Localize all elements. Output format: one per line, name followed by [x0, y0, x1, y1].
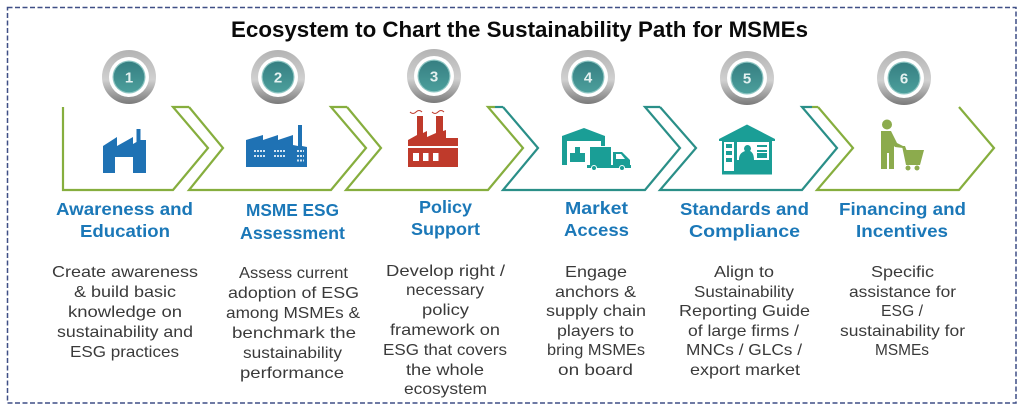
description 6: MSMEs [875, 342, 929, 359]
chevron 5 [660, 107, 837, 190]
description 3: policy [422, 302, 469, 319]
description 5: MNCs / GLCs / [686, 342, 803, 359]
heading 6: Incentives [856, 221, 948, 241]
heading 6 [839, 199, 966, 241]
description 6 [840, 264, 966, 359]
description 2: Assess current [239, 265, 349, 282]
description 3: framework on [390, 322, 500, 339]
description 1: ESG practices [70, 344, 179, 361]
description 2: benchmark the [232, 325, 356, 342]
number badge 1 [102, 50, 156, 104]
heading 3 [411, 197, 480, 239]
description 3: the whole [406, 362, 484, 379]
step 2: MSME ESG Assessment [189, 50, 366, 382]
number badge 4 [561, 50, 615, 104]
description 4: Engage [565, 264, 627, 281]
icon: polluting factory [408, 110, 458, 167]
description 2 [226, 265, 360, 382]
description 3: ESG that covers [383, 342, 507, 359]
description 1: Create awareness [52, 264, 198, 281]
description 4: bring MSMEs [547, 342, 645, 359]
description 3 [383, 263, 507, 398]
number badge 3: 3 [430, 68, 438, 86]
description 3: Develop right / [386, 263, 506, 280]
icon: kiosk [719, 124, 775, 174]
description 6: assistance for [849, 284, 957, 301]
description 1: knowledge on [68, 304, 182, 321]
number badge 3 [407, 49, 461, 103]
heading 5: Standards and [680, 199, 809, 219]
heading 4: Market [565, 198, 628, 218]
icon: factory [103, 129, 146, 173]
description 2: adoption of ESG [228, 285, 359, 302]
heading 2: Assessment [240, 223, 345, 243]
description 4: anchors & [555, 284, 636, 301]
number badge 6 [877, 51, 931, 105]
number badge 1: 1 [125, 70, 133, 86]
step 4: Market Access [503, 50, 680, 379]
chevron 4 [503, 107, 680, 190]
step 3: Policy Support [346, 49, 523, 398]
heading 1: Education [80, 221, 170, 241]
heading 2: MSME ESG [246, 200, 339, 220]
heading 3: Policy [419, 197, 472, 217]
description 2: sustainability [243, 345, 342, 362]
description 6: Specific [871, 264, 934, 281]
number badge 5 [720, 51, 774, 105]
icon: warehouse and truck [562, 128, 631, 170]
title: Ecosystem to Chart the Sustainability Path for MSMEs [231, 17, 808, 42]
description 1 [52, 264, 198, 361]
number badge 2: 2 [274, 70, 282, 86]
description 6: sustainability for [840, 323, 966, 340]
heading 4 [564, 198, 629, 240]
description 4: players to [557, 323, 634, 340]
chevron 1 [63, 107, 208, 190]
number badge 4: 4 [584, 70, 593, 86]
description 4 [546, 264, 646, 379]
number badge 6: 6 [900, 70, 908, 88]
heading 1: Awareness and [56, 199, 193, 219]
step 5: Standards and Compliance [660, 51, 837, 379]
number badge 5: 5 [743, 70, 751, 88]
description 1: & build basic [74, 284, 176, 301]
description 3: ecosystem [404, 381, 487, 398]
number badge 2 [251, 50, 305, 104]
heading 3: Support [411, 219, 480, 239]
chevron 3 [346, 107, 523, 190]
heading 4: Access [564, 220, 629, 240]
step 6: Financing and Incentives [817, 51, 994, 359]
description 2: among MSMEs & [226, 305, 360, 322]
heading 6: Financing and [839, 199, 966, 219]
description 5 [679, 264, 810, 379]
description 4: on board [558, 362, 633, 379]
description 1: sustainability and [57, 324, 193, 341]
description 5: of large firms / [688, 323, 800, 340]
description 5: Align to [714, 264, 774, 281]
step 1: Awareness and Education [52, 50, 208, 361]
description 6: ESG / [881, 303, 924, 320]
heading 5: Compliance [689, 221, 800, 241]
icon: factory with windows [246, 125, 307, 167]
description 4: supply chain [546, 303, 646, 320]
description 3: necessary [406, 282, 484, 299]
chevron 6 [817, 107, 994, 190]
chevron 2 [189, 107, 366, 190]
description 5: export market [690, 362, 801, 379]
heading 5 [680, 199, 809, 241]
heading 2 [240, 200, 345, 243]
heading 1 [56, 199, 193, 241]
description 2: performance [240, 365, 344, 382]
icon: person with shopping cart [881, 120, 924, 170]
description 5: Sustainability [694, 284, 794, 301]
description 5: Reporting Guide [679, 303, 810, 320]
